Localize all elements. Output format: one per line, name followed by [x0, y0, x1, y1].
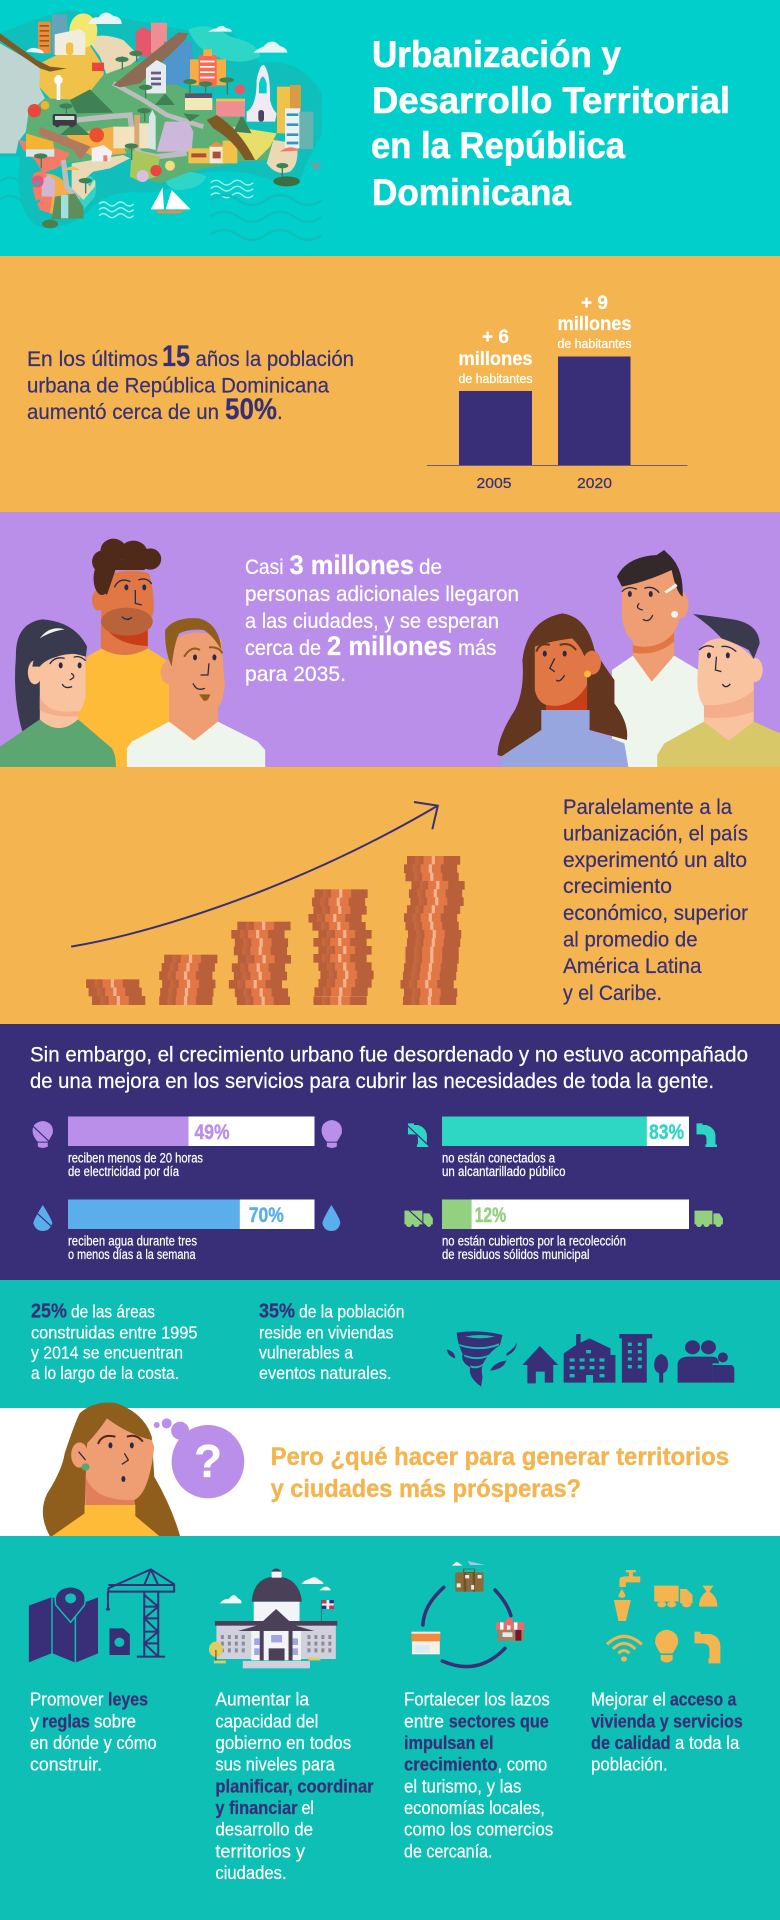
question heading [271, 1443, 729, 1503]
waterfall [52, 193, 83, 219]
stat: coast: construidas entre 1995 [31, 1322, 198, 1342]
text: housing access [591, 1690, 743, 1774]
text: laws and rules: sobre [94, 1712, 136, 1732]
migration statement: personas adicionales llegaron [245, 583, 519, 606]
growth arrow [71, 802, 438, 947]
icon: apartment building [564, 1334, 615, 1383]
stat: coast: de las áreas [71, 1302, 155, 1322]
icon: debris [447, 1343, 516, 1371]
panel: header [0, 0, 780, 256]
people right group [498, 550, 780, 767]
flowers and palms [28, 104, 41, 117]
stat: housing: 35% [259, 1300, 295, 1322]
text: laws and rules: leyes [108, 1690, 148, 1710]
question heading: y ciudades más prósperas? [271, 1475, 581, 1503]
bar: sewer: un alcantarillado público [442, 1164, 566, 1179]
services heading: de una mejora en los servicios para cubrir las necesidades de toda la gente. [30, 1070, 714, 1093]
panel: urban population [0, 256, 780, 512]
text: government capacity: gobierno en todos [215, 1733, 351, 1753]
question heading: Pero ¿qué hacer para generar territorios [271, 1443, 729, 1471]
bar: waste [442, 1200, 689, 1262]
stat: coast: 25% [31, 1300, 67, 1322]
title: en la República [371, 125, 625, 166]
text: government capacity: planificar, coordinar [215, 1776, 374, 1796]
text: sector ties: economías locales, [404, 1798, 545, 1818]
bar: water: o menos días a la semana [68, 1247, 196, 1262]
label 2005: 2005 [476, 475, 512, 492]
bar: waste: no están cubiertos por la recolección [442, 1234, 626, 1248]
bar: waste: 12% [475, 1204, 506, 1227]
text: laws and rules: construir. [30, 1754, 102, 1774]
growth statement: económico, superior [563, 902, 748, 925]
growth statement: experimentó un alto [563, 849, 747, 872]
bar: sewer: 83% [649, 1121, 684, 1144]
text: sector ties: entre [404, 1712, 444, 1732]
population statement: 15 [162, 340, 190, 373]
bar: waste: de residuos sólidos municipal [442, 1247, 590, 1262]
text: laws and rules: Promover [30, 1690, 104, 1710]
text: housing access: acceso a [670, 1690, 737, 1710]
text: housing access: Mejorar el [591, 1690, 666, 1710]
population statement: 50% [225, 393, 277, 426]
icon: economic cycle [411, 1561, 524, 1667]
bar 2005 [459, 391, 532, 465]
stat: coast: a lo largo de la costa. [31, 1363, 179, 1383]
stat: housing: vulnerables a [259, 1342, 353, 1362]
bar: electricity: reciben menos de 20 horas [68, 1150, 203, 1166]
waves [99, 180, 253, 218]
migration statement: a las ciudades, y se esperan [245, 610, 499, 633]
text: sector ties: impulsan el [404, 1733, 494, 1753]
icon: family [678, 1340, 734, 1383]
label 2020: millones [558, 314, 632, 335]
stat: coast [31, 1300, 198, 1383]
text: government capacity: y financiar [215, 1798, 298, 1818]
population statement: urbana de República Dominicana [27, 374, 329, 398]
text: government capacity: desarrollo de [215, 1820, 313, 1840]
text: sector ties: el turismo, y las [404, 1776, 521, 1796]
coin stacks [86, 856, 465, 1005]
bar 2020 [558, 356, 630, 465]
panel: economic growth [0, 767, 780, 1024]
icon: drops [29, 1205, 340, 1231]
text: laws and rules: y [30, 1712, 39, 1732]
icon: pipes [404, 1122, 717, 1148]
migration statement [245, 550, 519, 686]
icon: housing services [607, 1570, 720, 1663]
label 2005: + 6 [482, 327, 509, 348]
bar: electricity: de electricidad por día [68, 1164, 179, 1179]
text: government capacity: el [302, 1798, 314, 1818]
bar: water [68, 1200, 314, 1262]
growth statement: y el Caribe. [563, 982, 662, 1005]
growth statement [563, 796, 748, 1005]
label 2020: 2020 [577, 475, 612, 492]
text: government capacity [215, 1690, 374, 1883]
icon: trucks [404, 1206, 723, 1230]
migration statement: Casi [245, 556, 284, 579]
title: Desarrollo Territorial [372, 80, 730, 121]
icon: house [522, 1346, 558, 1383]
text: housing access: población. [591, 1754, 668, 1774]
panel: recommendations [0, 1536, 780, 1920]
text: housing access: vivienda y servicios [591, 1712, 743, 1732]
clouds [26, 12, 287, 53]
text: sector ties: de cercanía. [404, 1842, 492, 1862]
icon: capitol [209, 1568, 337, 1668]
icon: tree [654, 1354, 668, 1383]
text: laws and rules: reglas [42, 1712, 90, 1732]
bar: electricity [68, 1116, 314, 1179]
text: laws and rules: en dónde y cómo [30, 1733, 157, 1753]
services heading [30, 1044, 748, 1093]
text: housing access: de calidad [591, 1733, 671, 1753]
question mark: ? [194, 1435, 222, 1487]
text: sector ties: como los comercios [404, 1820, 553, 1840]
text: sector ties: Fortalecer los lazos [404, 1690, 550, 1710]
stat: housing: reside en viviendas [259, 1322, 394, 1342]
population statement [27, 340, 354, 426]
icon: map, crane, document [29, 1569, 174, 1662]
stat: housing: eventos naturales. [259, 1363, 392, 1383]
label 2005: de habitantes [458, 372, 532, 386]
growth statement: al promedio de [563, 928, 698, 952]
arrows/hands roads [0, 33, 67, 72]
panel: migration to cities [0, 512, 780, 767]
text: sector ties [404, 1690, 553, 1862]
growth statement: urbanización, el país [563, 822, 748, 846]
label 2020 [558, 293, 632, 492]
migration statement: 3 millones [290, 550, 414, 580]
migration statement: más [458, 637, 496, 660]
migration statement: cerca de [245, 637, 321, 660]
sailboat [151, 187, 191, 209]
icons: natural events [447, 1331, 734, 1387]
panel: climate vulnerability [0, 1280, 780, 1408]
population statement: aumentó cerca de un [27, 401, 219, 424]
title: Dominicana [372, 172, 571, 213]
panel: services [0, 1024, 780, 1280]
panel: question [0, 1403, 780, 1536]
migration statement: para 2035. [245, 663, 346, 686]
bar: electricity: 49% [194, 1121, 230, 1144]
icon: tornado [457, 1331, 502, 1387]
text: government capacity: ciudades. [215, 1863, 287, 1883]
growth statement: Paralelamente a la [563, 796, 732, 819]
label 2020: + 9 [581, 293, 608, 314]
population statement: años la población [196, 348, 354, 371]
growth statement: crecimiento [563, 875, 672, 898]
woman thinking [43, 1403, 180, 1536]
stat: housing: de la población [299, 1302, 404, 1322]
bar: sewer: no están conectados a [442, 1150, 555, 1166]
buildings [52, 14, 67, 54]
text: government capacity: territorios y [215, 1842, 305, 1862]
population statement: En los últimos [27, 348, 158, 371]
stat: coast: y 2014 se encuentran [31, 1342, 183, 1362]
growth statement: América Latina [563, 955, 702, 978]
text: government capacity: Aumentar la [215, 1690, 310, 1710]
text: laws and rules [30, 1690, 157, 1774]
bar chart: urban population [427, 293, 688, 492]
text: government capacity: sus niveles para [215, 1754, 336, 1774]
stat: housing [259, 1300, 404, 1383]
icon: tower [619, 1334, 652, 1383]
label 2005: millones [458, 349, 532, 370]
title [371, 34, 730, 213]
text: housing access: a toda la [675, 1733, 740, 1753]
population statement: . [277, 401, 283, 424]
thought bubble [154, 1418, 244, 1498]
map illustration [0, 10, 322, 240]
text: sector ties: , como [498, 1754, 547, 1774]
services heading: Sin embargo, el crecimiento urbano fue desordenado y no estuvo acompañado [30, 1044, 748, 1066]
migration statement: 2 millones [327, 631, 452, 661]
migration statement: de [419, 556, 442, 579]
bar: water: reciben agua durante tres [68, 1234, 197, 1248]
title: Urbanización y [372, 34, 621, 75]
text: government capacity: capacidad del [215, 1712, 318, 1732]
label 2020: de habitantes [558, 337, 632, 351]
bar: water: 70% [249, 1204, 284, 1227]
icon: bulbs [29, 1120, 342, 1148]
label 2005 [458, 327, 532, 492]
text: sector ties: crecimiento [404, 1754, 498, 1774]
service icons [29, 1120, 723, 1231]
bar: sewer [442, 1116, 689, 1179]
text: sector ties: sectores que [449, 1712, 549, 1732]
people left group [0, 539, 265, 767]
